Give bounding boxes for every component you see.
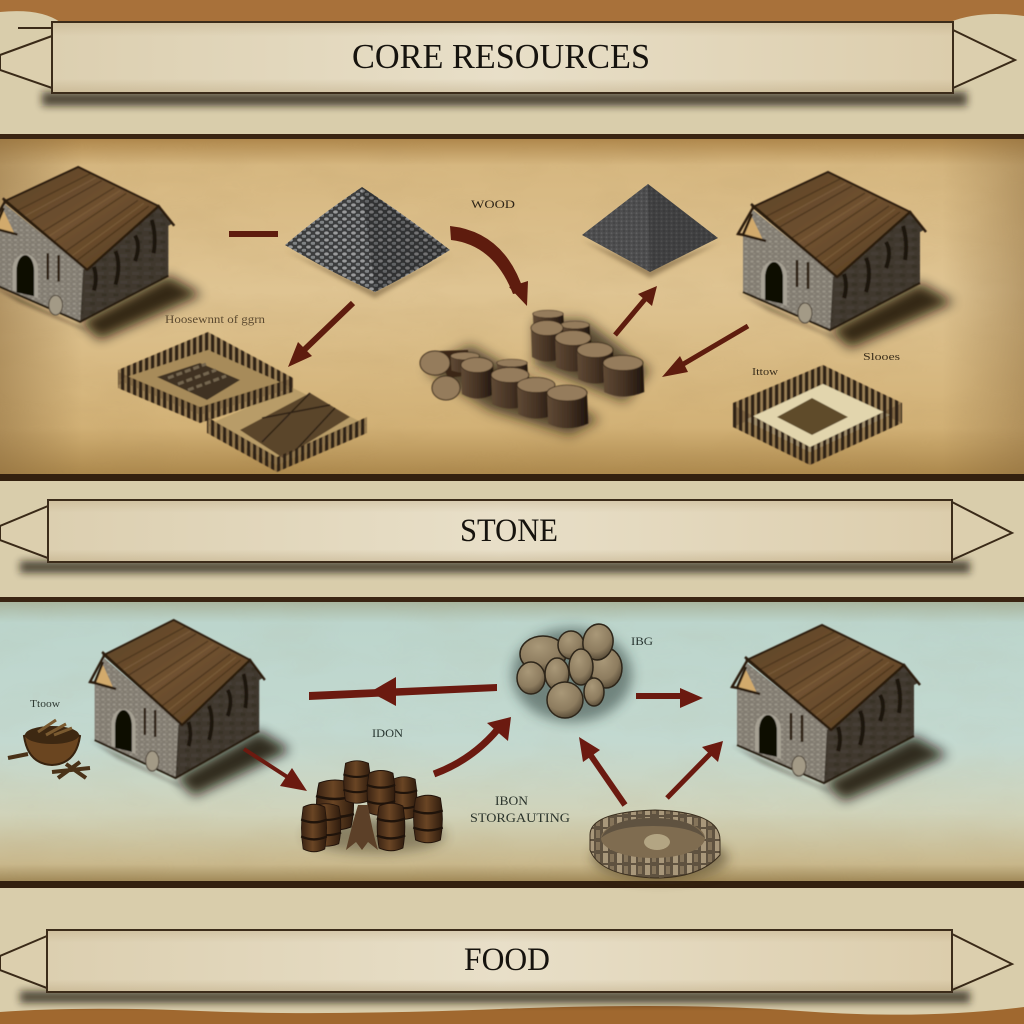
icon: stone ring: [590, 810, 728, 880]
banner: food: [0, 930, 1012, 1003]
label: basket: Ttoow: [30, 698, 60, 710]
banner: core resources: [0, 22, 1015, 106]
heading: core resources: CORE RESOURCES: [352, 37, 650, 76]
icon: rocks: [512, 622, 632, 722]
label: rocks: IBG: [631, 634, 653, 648]
icon: fenced field right: [733, 365, 902, 465]
banner: stone: [0, 500, 1012, 573]
top torn edge: [0, 0, 1024, 22]
icon: house top right: [738, 172, 954, 348]
icon: barrels: [301, 761, 445, 853]
heading: stone: STONE: [460, 513, 558, 549]
icon: house top left: [0, 167, 202, 339]
icon: gravel pile light: [285, 187, 452, 298]
label: iron storage: STORGAUTING: [470, 810, 570, 825]
arrow: house to logs: [662, 326, 748, 377]
icon: basket: [8, 720, 90, 778]
label: harvest: Hoosewnnt of ggrn: [165, 312, 265, 326]
arrow: dash: [229, 231, 278, 237]
heading: food: FOOD: [464, 942, 550, 978]
bottom torn edge: [0, 1006, 1024, 1024]
label: iron: IDON: [372, 726, 403, 740]
icon: gravel pile dark: [582, 184, 720, 278]
arrow: to field: [288, 303, 353, 367]
icon: house left: [90, 620, 291, 796]
icon: wood logs: [420, 310, 650, 435]
arrow: house to barrels: [244, 749, 307, 791]
arrow: logs to gravel: [615, 286, 657, 335]
label: iron storage: IBON: [495, 793, 529, 808]
arrow: long left: [309, 677, 497, 706]
panel: iron: [0, 597, 1024, 888]
label: field right: Slooes: [863, 351, 900, 363]
arrow: barrels to rocks: [434, 717, 511, 774]
arrow: rocks to house: [636, 688, 703, 708]
panel: wood: [0, 134, 1024, 481]
icon: house right: [732, 625, 948, 801]
label: wood: WOOD: [471, 197, 515, 211]
icon: fenced field left: [118, 332, 367, 472]
label: field left: Ittow: [752, 366, 778, 378]
arrow: ring to rocks: [579, 737, 625, 805]
arrow: curved to logs: [450, 226, 528, 306]
arrow: ring to house: [667, 741, 723, 798]
